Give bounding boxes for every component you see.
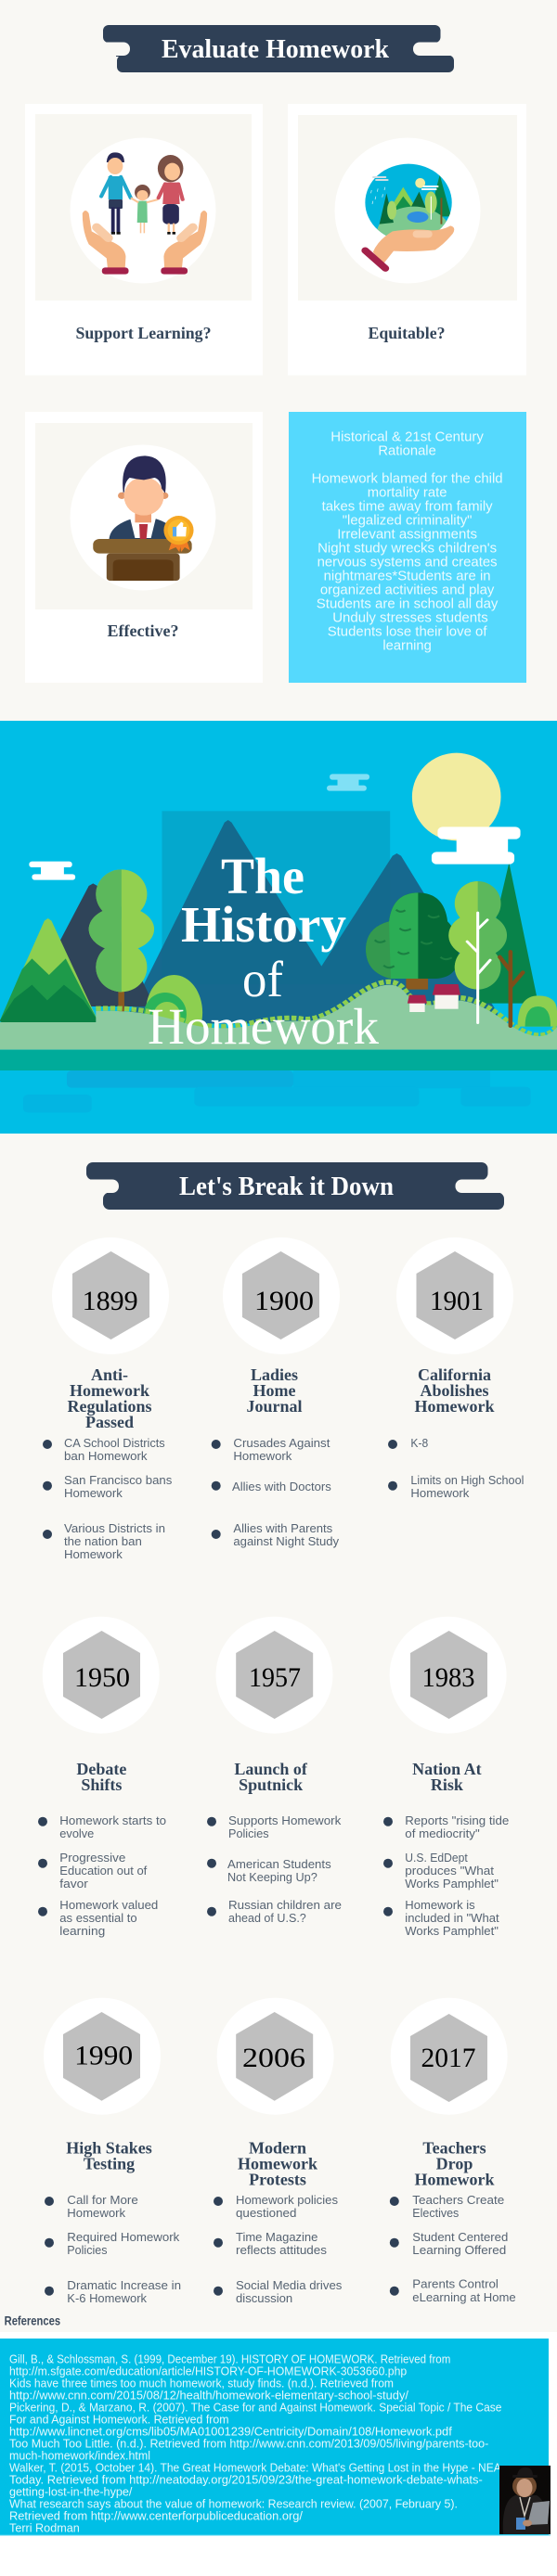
timeline item: 1990: Policies <box>67 2243 108 2257</box>
timeline item: 1899: the nation ban <box>64 1534 142 1548</box>
timeline item: 1899: Various Districts in <box>64 1521 165 1535</box>
panel: reference list: getting-lost-in-the-hype/ <box>9 2486 133 2499</box>
timeline item: 2017: Drop <box>436 2155 473 2173</box>
panel: reference list: Retrieved from http://www.centerforpubliceducation.org/ <box>9 2510 304 2523</box>
timeline item: 1950: Progressive <box>59 1851 125 1865</box>
timeline item: 1950: evolve <box>59 1826 94 1840</box>
timeline item: 1957: Supports Homework <box>228 1813 342 1827</box>
timeline item: 1957: Not Keeping Up? <box>227 1870 317 1884</box>
timeline item: 1983: produces "What <box>405 1864 494 1878</box>
timeline item: 1900: Allies with Doctors <box>232 1480 331 1493</box>
timeline item: 2006: questioned <box>236 2206 296 2220</box>
timeline item: 1899: ban Homework <box>64 1449 148 1463</box>
timeline item: 1899: Passed <box>85 1413 134 1431</box>
timeline item: 2017: Homework <box>415 2171 494 2189</box>
panel: historical and 21st century rationale: Historical & 21st Century <box>330 429 484 445</box>
timeline item: 1983: Works Pamphlet" <box>405 1877 499 1890</box>
timeline item: 1950: Homework valued <box>59 1898 158 1912</box>
timeline item: 1899: CA School Districts <box>64 1436 165 1450</box>
timeline item: 1901: California <box>418 1365 491 1384</box>
panel: support learning <box>25 104 263 375</box>
timeline item: 1957: Launch of <box>234 1760 308 1778</box>
timeline item: 1957: Russian children are <box>228 1898 342 1912</box>
timeline item: 1957: American Students <box>227 1857 331 1871</box>
timeline item: 1950: as essential to <box>59 1911 137 1925</box>
banner: Evaluate Homework: Evaluate Homework <box>162 35 389 64</box>
timeline item: 1901: K-8 <box>410 1436 428 1450</box>
label: Support Learning?: Support Learning? <box>76 324 212 342</box>
panel: historical and 21st century rationale <box>289 412 526 683</box>
panel: historical and 21st century rationale: Rationale <box>378 443 436 459</box>
timeline item: 1950: Education out of <box>59 1864 148 1878</box>
timeline item: 2017: Electives <box>412 2206 460 2220</box>
timeline item: 1990: 1990 <box>74 2041 133 2071</box>
panel: reference list: Too Much Too Little. (n.d.). Retrieved from http://www.cnn.com/2013/09/05/living/parents-too- <box>9 2438 488 2451</box>
timeline item: 2006: Time Magazine <box>236 2230 317 2244</box>
panel: historical and 21st century rationale: nervous systems and creates <box>317 555 498 570</box>
panel: reference list: much-homework/index.html <box>9 2450 150 2463</box>
timeline item: 1983: 1983 <box>421 1662 475 1693</box>
timeline item: 1899: Homework <box>70 1381 149 1400</box>
panel: historical and 21st century rationale: Students are in school all day <box>317 596 499 612</box>
timeline item: 2017 <box>390 1998 516 2304</box>
timeline item: 1983 <box>383 1617 509 1938</box>
panel: historical and 21st century rationale: mortality rate <box>368 485 447 501</box>
timeline item: 1899 <box>43 1237 173 1561</box>
timeline item: 2006 <box>214 1998 343 2305</box>
timeline item: 1957: Policies <box>228 1826 269 1840</box>
timeline item: 1901 <box>388 1237 525 1500</box>
timeline item: 1983: Works Pamphlet" <box>405 1924 499 1938</box>
panel: historical and 21st century rationale: takes time away from family <box>322 499 493 515</box>
label: Effective?: Effective? <box>108 622 178 640</box>
timeline item: 1900: Crusades Against <box>233 1436 330 1450</box>
timeline item: 2017: 2017 <box>421 2043 475 2073</box>
timeline item: 1900: Journal <box>246 1397 303 1416</box>
panel: historical and 21st century rationale: Students lose their love of <box>328 624 487 640</box>
icon: speaker at podium with badge <box>93 455 194 581</box>
timeline item: 2017: Student Centered <box>412 2230 508 2244</box>
timeline item: 1901: 1901 <box>430 1286 484 1316</box>
timeline item: 1983: Nation At <box>412 1760 482 1778</box>
timeline item: 1899: Anti- <box>91 1365 128 1384</box>
panel: equitable <box>288 104 526 375</box>
timeline item: 1900: 1900 <box>254 1286 314 1316</box>
panel: historical and 21st century rationale: Irrelevant assignments <box>337 527 477 543</box>
title: The History of Homework <box>148 848 379 1055</box>
title: The History of Homework: History <box>181 896 346 953</box>
timeline item: 2006: Modern <box>249 2139 306 2158</box>
timeline item: 1899: Homework <box>64 1547 123 1561</box>
panel: reference list: Gill, B., & Schlossman, S. (1999, December 19). HISTORY OF HOMEWORK. Retrieved from <box>9 2353 450 2366</box>
timeline item: 2006: Homework <box>238 2155 317 2173</box>
panel: reference list: Kids have three times too much homework, study finds. (n.d.). Retrieved from <box>9 2377 394 2390</box>
panel: historical and 21st century rationale: Unduly stresses students <box>332 610 488 626</box>
panel: reference list: http://www.lincnet.org/cms/lib05/MA01001239/Centricity/Domain/108/Homework.pdf <box>9 2426 452 2439</box>
timeline item: 2006: Protests <box>249 2171 306 2189</box>
timeline item: 2017: Teachers Create <box>412 2193 504 2207</box>
timeline item: 1957: 1957 <box>249 1662 301 1693</box>
timeline item: 1900 <box>212 1237 340 1548</box>
timeline item: 1990: High Stakes <box>66 2139 152 2158</box>
timeline item: 1900: Allies with Parents <box>233 1521 333 1535</box>
timeline item: 1983: included in "What <box>405 1911 499 1925</box>
timeline item: 1990: Call for More <box>67 2193 138 2207</box>
panel: reference list <box>0 2339 551 2536</box>
timeline item: 1950: Shifts <box>81 1775 122 1794</box>
timeline item: 1983: Risk <box>431 1775 463 1794</box>
timeline item: 1990 <box>44 1998 181 2305</box>
timeline item: 1899: Homework <box>64 1486 123 1500</box>
panel: reference list: For and Against Homework. Retrieved from <box>9 2414 228 2427</box>
timeline item: 1950: Debate <box>76 1760 126 1778</box>
timeline item: 1957: ahead of U.S.? <box>228 1911 306 1925</box>
panel: reference list: Walker, T. (2015, October 14). The Great Homework Debate: What's Getting Lost in the Hype - NEA <box>9 2462 501 2475</box>
timeline item: 1990: Testing <box>84 2155 135 2173</box>
panel: reference list: What research says about the value of homework: Research review. (2007, February 5). <box>9 2498 458 2511</box>
panel: reference list: Terri Rodman <box>9 2522 80 2535</box>
panel: historical and 21st century rationale: nightmares*Students are in <box>324 569 491 584</box>
timeline item: 1990: Homework <box>67 2206 126 2220</box>
panel: historical and 21st century rationale: learning <box>382 638 432 654</box>
panel: historical and 21st century rationale: Night study wrecks children's <box>317 541 497 557</box>
title: The History of Homework: Homework <box>148 998 379 1055</box>
title: The History of Homework: The <box>221 848 304 904</box>
timeline item: 1950 <box>38 1617 166 1938</box>
timeline item: 1900: Ladies <box>251 1365 298 1384</box>
timeline item: 2017: eLearning at Home <box>412 2290 516 2304</box>
photo: author portrait <box>499 2466 551 2534</box>
timeline item: 2017: Parents Control <box>412 2277 499 2291</box>
timeline item: 1990: K-6 Homework <box>67 2291 147 2305</box>
timeline item: 2006: discussion <box>236 2291 292 2305</box>
title: The History of Homework: of <box>242 951 284 1007</box>
timeline item: 2006: 2006 <box>242 2043 305 2073</box>
banner: Let's Break it Down: Let's Break it Down <box>179 1173 394 1201</box>
timeline item: 2006: Social Media drives <box>236 2278 343 2292</box>
timeline item: 1950: Homework starts to <box>59 1813 166 1827</box>
panel: effective <box>25 412 263 683</box>
timeline item: 2006: reflects attitudes <box>236 2243 328 2257</box>
timeline item: 1901: Abolishes <box>420 1381 489 1400</box>
label: Equitable?: Equitable? <box>368 324 446 342</box>
timeline item: 1950: 1950 <box>74 1662 130 1693</box>
timeline item: 1901: Homework <box>410 1486 470 1500</box>
timeline item: 1899: Regulations <box>67 1397 152 1416</box>
hero illustration <box>0 753 557 1112</box>
timeline item: 1983: of mediocrity" <box>405 1826 480 1840</box>
timeline item: 1990: Dramatic Increase in <box>67 2278 181 2292</box>
timeline item: 1900: Homework <box>233 1449 292 1463</box>
timeline item: 1983: Reports "rising tide <box>405 1813 509 1827</box>
icon: family in hands <box>83 152 207 275</box>
timeline item: 1950: learning <box>59 1924 105 1938</box>
timeline item: 1900: against Night Study <box>233 1534 340 1548</box>
timeline item: 1899: 1899 <box>83 1286 138 1316</box>
timeline item: 1900: Home <box>253 1381 296 1400</box>
timeline item: 1983: U.S. EdDept <box>405 1851 468 1865</box>
timeline item: 1990: Required Homework <box>67 2230 180 2244</box>
timeline item: 1983: Homework is <box>405 1898 475 1912</box>
heading: References: References <box>5 2313 60 2328</box>
timeline item: 1957: Sputnick <box>239 1775 303 1794</box>
banner: Let's Break it Down <box>74 1162 520 1210</box>
icon: globe in a hand <box>365 164 454 268</box>
timeline item: 1901: Limits on High School <box>410 1473 525 1487</box>
panel: historical and 21st century rationale: "legalized criminality" <box>343 513 472 529</box>
timeline item: 1899: San Francisco bans <box>64 1473 173 1487</box>
panel: reference list: http://www.cnn.com/2015/08/12/health/homework-elementary-school-study/ <box>9 2390 409 2403</box>
timeline item: 2017: Learning Offered <box>412 2243 506 2257</box>
timeline item: 1957 <box>207 1617 342 1925</box>
timeline item: 2006: Homework policies <box>236 2193 339 2207</box>
panel: historical and 21st century rationale: organized activities and play <box>320 583 495 598</box>
timeline item: 1901: Homework <box>415 1397 494 1416</box>
panel: reference list: http://m.sfgate.com/education/article/HISTORY-OF-HOMEWORK-3053660.php <box>9 2365 407 2378</box>
timeline item: 2017: Teachers <box>422 2139 486 2158</box>
hero: The History of Homework landscape <box>0 721 557 1134</box>
panel: historical and 21st century rationale: Homework blamed for the child <box>312 471 503 487</box>
panel: reference list: Pickering, D., & Marzano, R. (2007). The Case for and Against Homework. Special Topic / The Case <box>9 2402 501 2415</box>
banner: Evaluate Homework <box>93 25 464 72</box>
panel: reference list: Today. Retrieved from http://neatoday.org/2015/09/23/the-great-homework-debate-whats- <box>9 2474 483 2487</box>
timeline item: 1950: favor <box>59 1877 89 1890</box>
